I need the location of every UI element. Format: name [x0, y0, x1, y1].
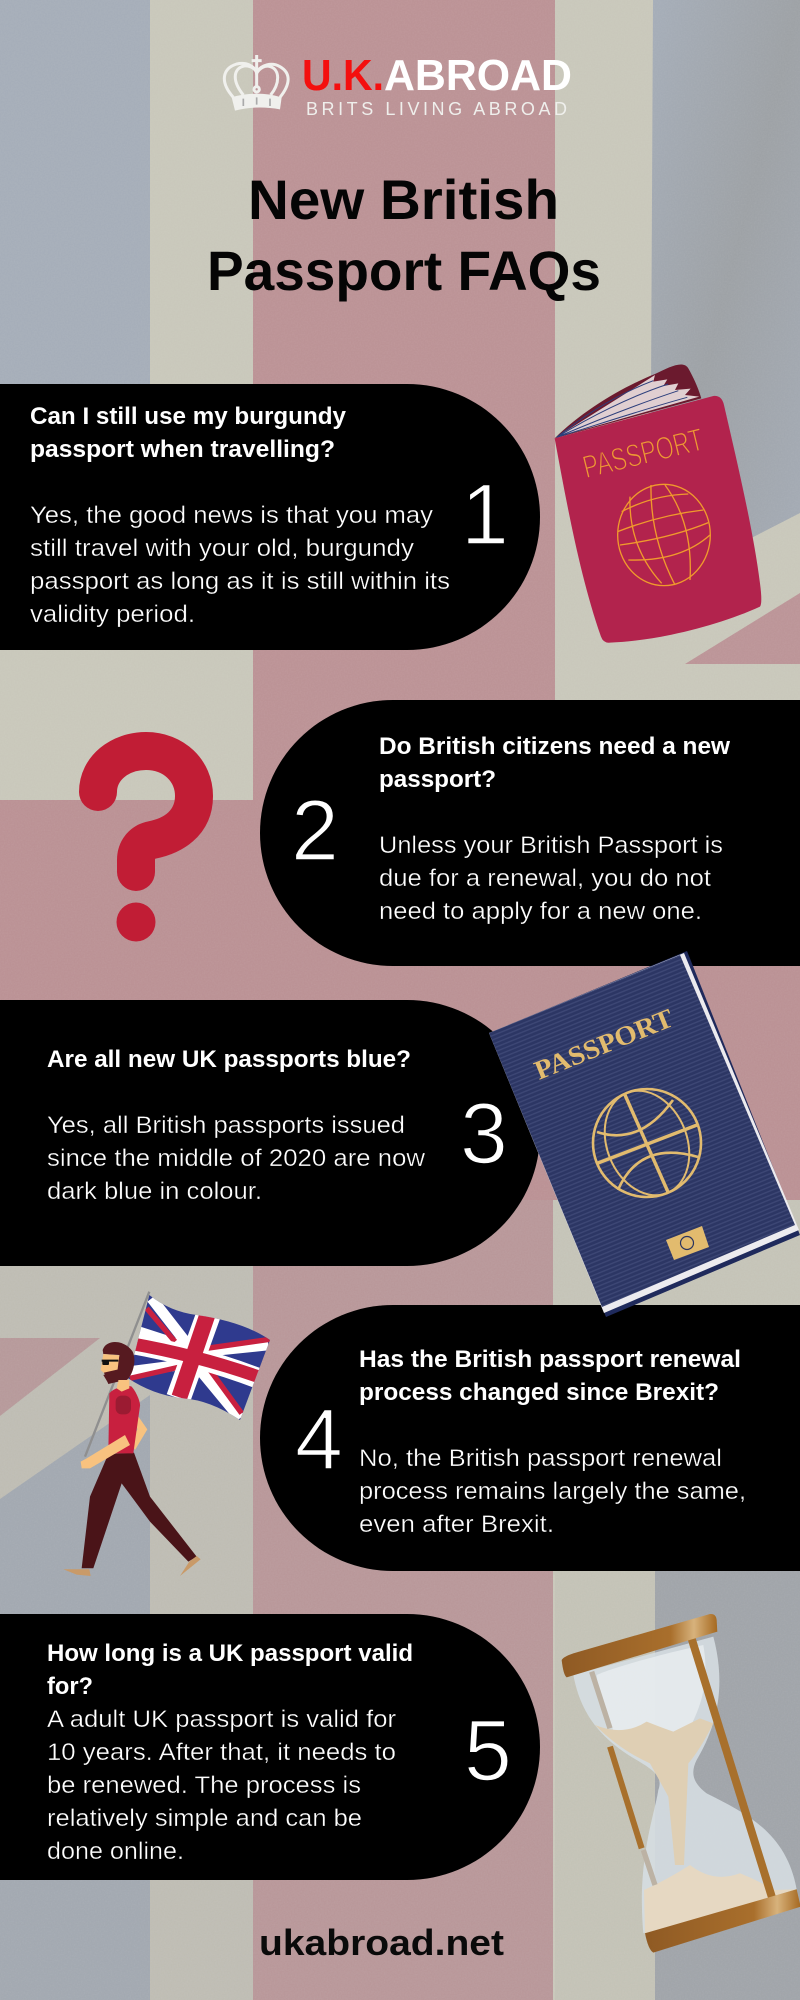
- answer 5: A adult UK passport is valid for: [47, 1706, 396, 1733]
- answer 5: relatively simple and can be: [47, 1805, 362, 1832]
- question 1: Can I still use my burgundy: [30, 403, 347, 430]
- icon: crown: [224, 55, 288, 111]
- panel: FAQ 2: [260, 700, 800, 966]
- answer 2: need to apply for a new one.: [379, 898, 702, 925]
- logo tagline: BRITS LIVING ABROAD: [306, 99, 567, 119]
- union flag: [128, 1295, 270, 1420]
- passport label: PASSPORT: [530, 1003, 678, 1086]
- answer 1: still travel with your old, burgundy: [30, 535, 414, 562]
- question 5: for?: [47, 1673, 93, 1700]
- bottom rim: [645, 1889, 800, 1953]
- title: [207, 168, 601, 302]
- number 2: 2: [291, 783, 339, 879]
- question 3: Are all new UK passports blue?: [47, 1046, 411, 1073]
- question 5: How long is a UK passport valid: [47, 1640, 413, 1667]
- answer 3: since the middle of 2020 are now: [47, 1145, 426, 1172]
- number 3: 3: [460, 1086, 508, 1182]
- question 2: Do British citizens need a new: [379, 733, 730, 760]
- number 4: 4: [295, 1392, 343, 1488]
- question 2: [379, 733, 730, 793]
- globe: [618, 484, 710, 586]
- answer 5: done online.: [47, 1838, 184, 1865]
- answer 5: 10 years. After that, it needs to: [47, 1739, 396, 1766]
- flag pole: [85, 1292, 149, 1457]
- answer 4: even after Brexit.: [359, 1511, 554, 1538]
- answer 3: [47, 1112, 426, 1205]
- answer 2: [379, 832, 723, 925]
- question 1: [30, 403, 347, 463]
- question 4: [359, 1346, 741, 1406]
- question 1: passport when travelling?: [30, 436, 335, 463]
- man: [63, 1342, 201, 1576]
- answer 4: process remains largely the same,: [359, 1478, 746, 1505]
- answer 1: passport as long as it is still within its: [30, 568, 450, 595]
- answer 3: Yes, all British passports issued: [47, 1112, 405, 1139]
- answer 5: be renewed. The process is: [47, 1772, 361, 1799]
- globe: [590, 1078, 704, 1208]
- number 1: 1: [461, 467, 509, 563]
- frame rods: [592, 1672, 655, 1885]
- question 5: [47, 1640, 413, 1700]
- title: Passport FAQs: [207, 239, 601, 302]
- passport label: PASSPORT: [579, 421, 707, 485]
- sand: [595, 1718, 713, 1865]
- answer 1: validity period.: [30, 601, 195, 628]
- top rim: [562, 1614, 717, 1677]
- answer 1: Yes, the good news is that you may: [30, 502, 433, 529]
- icon: hourglass: [562, 1614, 800, 1953]
- question 4: process changed since Brexit?: [359, 1379, 719, 1406]
- answer 2: due for a renewal, you do not: [379, 865, 711, 892]
- chip: [666, 1226, 709, 1260]
- icon: red question mark: [98, 751, 194, 942]
- logo wordmark red: U.K.: [302, 51, 384, 100]
- panel: FAQ 1: [0, 384, 540, 650]
- logo: U.K. Abroad: [224, 51, 572, 119]
- icon: navy passport: [489, 951, 800, 1317]
- glass: [573, 1637, 797, 1933]
- panel: FAQ 3: [0, 1000, 540, 1266]
- icon: burgundy passport: [555, 364, 761, 643]
- title: New British: [248, 168, 559, 231]
- answer 1: [30, 502, 450, 628]
- footer url: ukabroad.net: [259, 1922, 504, 1963]
- logo wordmark white: ABROAD: [384, 51, 572, 100]
- answer 4: [359, 1445, 746, 1538]
- panel: FAQ 5: [0, 1614, 540, 1880]
- number 5: 5: [464, 1703, 512, 1799]
- panel: FAQ 4: [260, 1305, 800, 1571]
- question 4: Has the British passport renewal: [359, 1346, 741, 1373]
- icon: man walking with union flag: [63, 1290, 277, 1576]
- question 2: passport?: [379, 766, 496, 793]
- answer 3: dark blue in colour.: [47, 1178, 262, 1205]
- answer 2: Unless your British Passport is: [379, 832, 723, 859]
- answer 5: [47, 1706, 396, 1865]
- answer 4: No, the British passport renewal: [359, 1445, 722, 1472]
